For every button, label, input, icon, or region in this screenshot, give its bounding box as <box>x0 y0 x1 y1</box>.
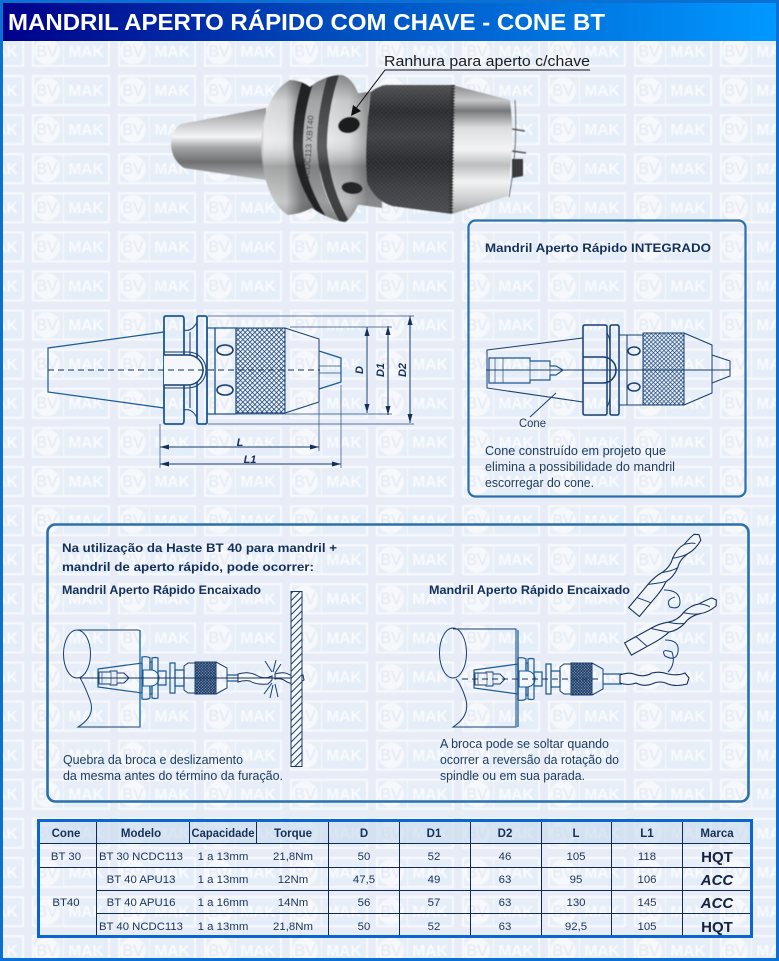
product photo: chuck <box>171 70 526 226</box>
technical drawing with dimensions: L <box>237 437 244 449</box>
cone label <box>519 393 556 430</box>
dimension L1 <box>160 463 341 465</box>
header row: Cone <box>52 828 80 840</box>
dimension L <box>160 446 319 448</box>
drill front part <box>238 673 272 684</box>
front flange <box>197 316 207 424</box>
row: BT 30 NCDC113: 105 <box>566 851 586 863</box>
row: BT 40 NCDC113: 105 <box>637 921 657 933</box>
centre line <box>462 678 600 680</box>
panel description: escorregar do cone. <box>485 476 594 490</box>
key hole upper <box>337 115 361 135</box>
row: BT 40 APU16: BT 40 APU16 <box>107 897 175 909</box>
row: BT 40 APU13: 1 a 13mm <box>198 874 248 886</box>
nose taper <box>285 328 319 413</box>
row: BT 40 APU13 <box>107 872 734 889</box>
row: BT 40 NCDC113: 92,5 <box>565 921 587 933</box>
row: BT 40 APU13: 49 <box>428 874 440 886</box>
header row: Marca <box>700 828 734 840</box>
header row: Torque <box>274 828 312 840</box>
header row: D1 <box>427 828 442 840</box>
row: BT 40 APU13: 63 <box>499 874 511 886</box>
centre line <box>48 369 320 371</box>
body ring <box>215 328 236 414</box>
left case text: Quebra da broca e deslizamento <box>63 753 243 767</box>
callout: key groove <box>351 53 590 116</box>
header row: D <box>360 828 368 840</box>
row: BT 40 APU16: 63 <box>499 897 511 909</box>
row: BT 40 APU13: 12Nm <box>278 874 308 886</box>
row: BT 30 NCDC113: 50 <box>358 851 370 863</box>
spindle <box>77 630 140 727</box>
panel description: elimina a possibilidade do mandril <box>485 460 675 474</box>
left case text: da mesma antes do término da furação. <box>63 769 283 783</box>
spindle <box>453 629 516 727</box>
key hole lower <box>341 181 363 195</box>
panel description: Cone construído em projeto que <box>485 444 666 458</box>
right case text: spindle ou em sua parada. <box>440 769 585 783</box>
drive slot <box>164 355 203 385</box>
row: BT 40 NCDC113: 21,8Nm <box>273 921 313 933</box>
dimension D2 <box>409 316 411 423</box>
jaws <box>319 351 341 389</box>
dimension D <box>366 327 368 413</box>
row: BT 40 APU16: 130 <box>566 897 586 909</box>
header row: Capacidade <box>192 828 254 840</box>
right case text <box>440 737 619 783</box>
row: BT 40 NCDC113: 63 <box>499 921 511 933</box>
shaft <box>227 675 240 681</box>
knurled sleeve <box>236 328 285 413</box>
falling drill lower <box>625 594 720 655</box>
title bar <box>3 3 776 41</box>
cone label: Cone <box>519 418 546 430</box>
cone label BT40: BT40 <box>52 897 80 909</box>
header row: L1 <box>640 828 654 840</box>
right case drawing: loose drill <box>440 530 720 727</box>
header row: L <box>572 828 580 840</box>
row: BT 30 NCDC113: 118 <box>638 851 656 863</box>
right case text: ocorrer a reversão da rotação do <box>440 753 619 767</box>
row: BT 40 APU13: ACC <box>700 872 734 889</box>
row: BT 30 NCDC113: 46 <box>499 851 511 863</box>
left case heading: Mandril Aperto Rápido Encaixado <box>62 583 261 597</box>
row: BT 40 APU16: 145 <box>637 897 657 909</box>
chuck <box>98 657 227 699</box>
row: BT 40 APU16: 56 <box>358 897 370 909</box>
drill in chuck <box>620 672 689 686</box>
row: BT 40 APU16 <box>107 895 734 912</box>
dimension D1 <box>387 326 389 415</box>
table header shading <box>39 821 751 843</box>
technical drawing with dimensions: D1 <box>375 363 387 377</box>
panel heading: Mandril Aperto Rápido INTEGRADO <box>485 241 711 255</box>
row: BT 30 NCDC113 <box>51 849 733 866</box>
row: BT 30 NCDC113: BT 30 <box>51 851 81 863</box>
panel description <box>485 444 675 490</box>
row: BT 40 APU13: 95 <box>570 874 582 886</box>
right case heading: Mandril Aperto Rápido Encaixado <box>429 583 630 597</box>
falling drill upper <box>629 530 704 616</box>
drill broken part <box>275 673 304 684</box>
panel heading: mandril de aperto rápido, pode ocorrer: <box>62 560 314 574</box>
groove <box>184 322 197 418</box>
front sleeve taper <box>452 85 512 214</box>
row: BT 40 NCDC113: HQT <box>701 919 733 936</box>
row: BT 40 APU16: 57 <box>428 897 440 909</box>
spark lines <box>264 660 281 698</box>
integrated chuck drawing <box>486 325 730 415</box>
technical drawing with dimensions: D <box>354 366 366 374</box>
engraved marking: NCDC113 XBT40 <box>301 115 316 182</box>
table grid <box>39 821 751 936</box>
serrated sleeve edge <box>451 85 453 214</box>
row: BT 40 NCDC113 <box>99 919 733 936</box>
row: BT 40 APU13: 47,5 <box>353 874 375 886</box>
panel: integrated chuck <box>468 220 746 496</box>
row: BT 30 NCDC113: HQT <box>701 849 733 866</box>
header row: Modelo <box>121 828 161 840</box>
row: BT 40 NCDC113: 52 <box>428 921 440 933</box>
table border <box>38 820 752 936</box>
row: BT 40 NCDC113: BT 40 NCDC113 <box>99 921 183 933</box>
row: BT 40 APU16: 14Nm <box>278 897 308 909</box>
panel heading: Na utilização da Haste BT 40 para mandril + <box>62 541 337 555</box>
flange set <box>258 70 372 226</box>
right case text: A broca pode se soltar quando <box>440 737 609 751</box>
neck <box>354 90 382 208</box>
rear flange <box>164 316 184 424</box>
specification table <box>38 820 752 936</box>
panel heading <box>62 541 337 574</box>
title bar: MANDRIL APERTO RÁPIDO COM CHAVE - CONE BT <box>8 8 606 35</box>
callout: key groove: Ranhura para aperto c/chave <box>384 53 590 70</box>
row: BT 30 NCDC113: 1 a 13mm <box>198 851 248 863</box>
chip spirals <box>664 590 680 608</box>
knurled sleeve <box>366 85 454 214</box>
row: BT 30 NCDC113: 52 <box>428 851 440 863</box>
technical drawing with dimensions <box>48 316 414 468</box>
panel: BT 40 issues <box>48 524 748 802</box>
neck <box>207 328 215 414</box>
left case drawing: drill breakage <box>64 592 304 766</box>
row: BT 30 NCDC113: 21,8Nm <box>273 851 313 863</box>
row: BT 40 APU16: 1 a 16mm <box>198 897 248 909</box>
cone <box>48 332 164 408</box>
wall <box>291 592 302 766</box>
row: BT 40 APU16: ACC <box>700 895 734 912</box>
extension lines <box>160 316 414 468</box>
axis <box>80 677 300 679</box>
row: BT 40 NCDC113: 50 <box>358 921 370 933</box>
row: BT 40 NCDC113: 1 a 13mm <box>198 921 248 933</box>
cone taper <box>171 108 266 180</box>
row: BT 30 NCDC113: BT 30 NCDC113 <box>99 851 183 863</box>
left case text <box>63 753 283 783</box>
row: BT 40 APU13: BT 40 APU13 <box>107 874 175 886</box>
holes <box>217 345 233 355</box>
row: BT 40 APU13: 106 <box>637 874 657 886</box>
technical drawing with dimensions: D2 <box>397 363 409 377</box>
header row: D2 <box>498 828 512 840</box>
header row <box>52 828 734 840</box>
jaws <box>512 129 526 153</box>
technical drawing with dimensions: L1 <box>244 454 256 466</box>
chuck <box>474 658 603 700</box>
